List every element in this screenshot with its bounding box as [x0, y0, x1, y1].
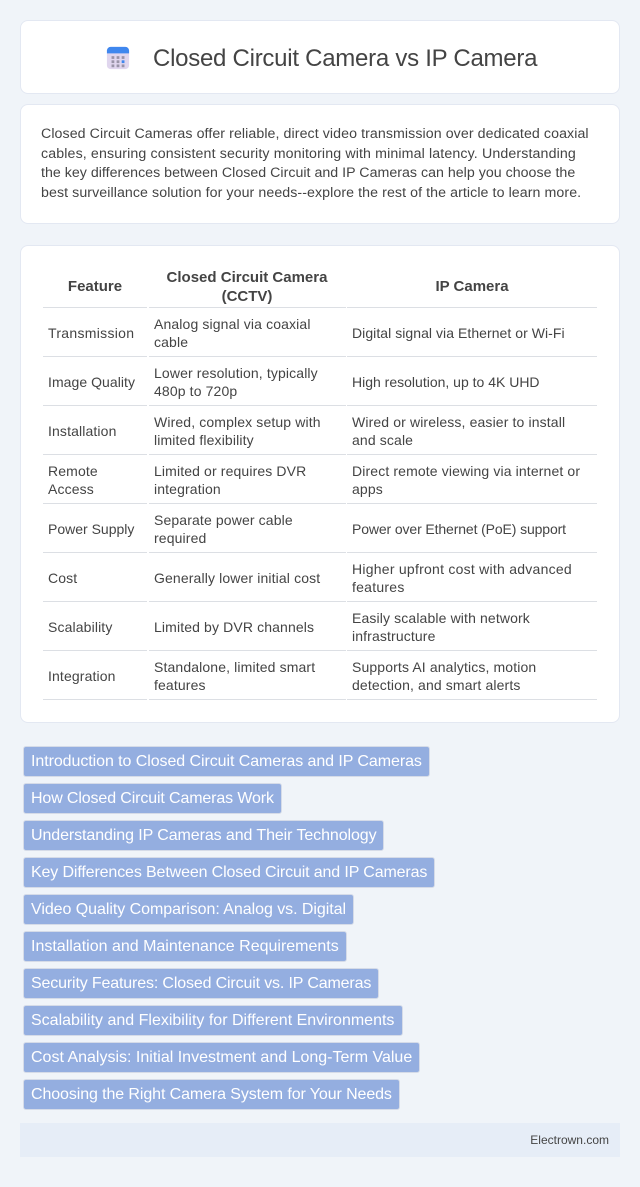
row: cost: Higher upfront cost with advanced — [352, 561, 572, 577]
comparison table panel — [20, 245, 620, 723]
table header — [68, 269, 509, 305]
row: transmission: Transmission — [48, 325, 134, 341]
row: installation: and scale — [352, 432, 413, 448]
footer credit: Electrown.com — [530, 1133, 609, 1147]
row: installation: Installation — [48, 423, 116, 439]
header: closed circuit camera — [167, 269, 328, 305]
row: image quality — [48, 365, 540, 399]
row: installation: Wired or wireless, easier to install — [352, 414, 565, 430]
icon: calendar — [106, 46, 130, 70]
row: image quality: High resolution, up to 4K UHD — [352, 374, 540, 390]
title card — [20, 20, 620, 94]
link: cost — [23, 1042, 420, 1073]
row: power supply: Power Supply — [48, 521, 134, 537]
link: installation — [23, 931, 347, 962]
link: key differences — [23, 857, 435, 888]
link: how cameras work — [23, 783, 282, 814]
link: understanding ip cameras: Understanding IP Cameras and Their Technology — [31, 827, 376, 844]
intro text: Closed Circuit Cameras offer reliable, direct video transmission over dedicated coaxial — [41, 126, 589, 142]
row: integration — [48, 659, 536, 693]
row: power supply: required — [154, 530, 206, 546]
row: remote access: Limited or requires DVR — [154, 463, 306, 479]
header: feature: Feature — [68, 278, 122, 295]
link: choosing — [23, 1079, 400, 1110]
row: power supply — [48, 512, 566, 546]
row: remote access: Access — [48, 481, 94, 497]
row: scalability: Easily scalable with network — [352, 610, 530, 626]
row: scalability: Scalability — [48, 619, 112, 635]
row: power supply: Power over Ethernet (PoE) support — [352, 521, 566, 537]
header: closed circuit camera: (CCTV) — [222, 288, 272, 305]
row: power supply: Separate power cable — [154, 512, 293, 528]
row: cost: Generally lower initial cost — [154, 570, 320, 586]
row: remote access: integration — [154, 481, 221, 497]
row: image quality: 480p to 720p — [154, 383, 237, 399]
link: cost: Cost Analysis: Initial Investment and Long-Term Value — [31, 1049, 412, 1066]
row: integration: Integration — [48, 668, 116, 684]
row: image quality: Image Quality — [48, 374, 135, 390]
link: security: Security Features: Closed Circuit vs. IP Cameras — [31, 975, 371, 992]
intro text — [41, 126, 589, 200]
title: Closed Circuit Camera vs IP Camera — [153, 45, 537, 72]
row: image quality: Lower resolution, typically — [154, 365, 318, 381]
row: transmission — [48, 316, 565, 350]
row: remote access: apps — [352, 481, 383, 497]
row: scalability: infrastructure — [352, 628, 436, 644]
link: installation: Installation and Maintenance Requirements — [31, 938, 339, 955]
row: integration: Supports AI analytics, motion — [352, 659, 536, 675]
row: integration: features — [154, 677, 206, 693]
row: remote access: Remote — [48, 463, 98, 479]
intro text: the key differences between Closed Circuit and IP Cameras can help you choose the — [41, 165, 575, 181]
row: remote access — [48, 463, 580, 497]
footer — [20, 1123, 620, 1157]
row: installation — [48, 414, 565, 448]
row: transmission: Analog signal via coaxial — [154, 316, 311, 332]
link: understanding ip cameras — [23, 820, 384, 851]
row: remote access: Direct remote viewing via internet or — [352, 463, 580, 479]
row: integration: detection, and smart alerts — [352, 677, 520, 693]
row: installation: Wired, complex setup with — [154, 414, 321, 430]
row: scalability — [48, 610, 530, 644]
intro text: best surveillance solution for your needs--explore the rest of the article to learn more. — [41, 184, 581, 200]
link: key differences: Key Differences Between Closed Circuit and IP Cameras — [31, 864, 427, 881]
row: cost — [48, 561, 572, 595]
link: scalability — [23, 1005, 403, 1036]
link: video quality: Video Quality Comparison: Analog vs. Digital — [31, 901, 346, 918]
link: scalability: Scalability and Flexibility for Different Environments — [31, 1012, 394, 1029]
header: ip camera: IP Camera — [435, 278, 509, 295]
link: video quality — [23, 894, 354, 925]
row: scalability: Limited by DVR channels — [154, 619, 314, 635]
link: how cameras work: How Closed Circuit Cameras Work — [31, 790, 274, 807]
row: cost: Cost — [48, 570, 77, 586]
row: transmission: cable — [154, 334, 188, 350]
topic link list — [23, 746, 435, 1110]
link: choosing: Choosing the Right Camera System for Your Needs — [31, 1086, 392, 1103]
intro card — [20, 104, 620, 224]
row: cost: features — [352, 579, 405, 595]
row: integration: Standalone, limited smart — [154, 659, 315, 675]
header: closed circuit camera: Closed Circuit Camera — [167, 269, 327, 286]
row: transmission: Digital signal via Ethernet or Wi-Fi — [352, 325, 565, 341]
row: installation: limited flexibility — [154, 432, 254, 448]
link: introduction: Introduction to Closed Circuit Cameras and IP Cameras — [31, 753, 422, 770]
link: security — [23, 968, 379, 999]
link: introduction — [23, 746, 430, 777]
intro text: cables, ensuring consistent security monitoring with minimal latency. Understanding — [41, 146, 576, 162]
